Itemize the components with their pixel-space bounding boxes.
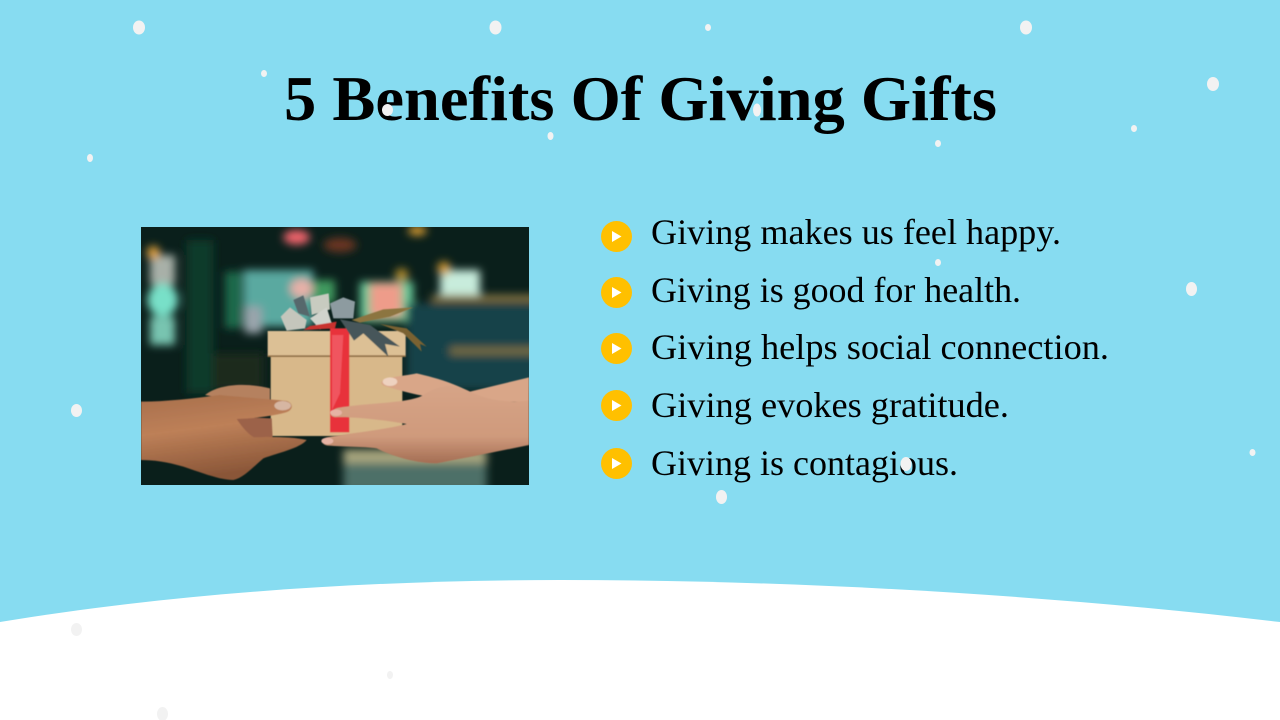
benefit list [601,212,1109,483]
benefit 4 text: Giving evokes gratitude. [651,385,1009,425]
title: 5 Benefits Of Giving Gifts [284,63,997,134]
ribbon bow [281,307,307,331]
right hand [321,373,529,463]
gift box [268,293,427,436]
benefit 3 text: Giving helps social connection. [651,327,1109,367]
photo background bokeh [147,226,540,493]
benefit 5 text: Giving is contagious. [651,443,958,483]
benefit 2 text: Giving is good for health. [651,270,1021,310]
bullet 1 [601,221,632,252]
photo: hands exchanging a gift box [141,226,540,493]
bullet 5 [601,448,632,479]
benefit 1 text: Giving makes us feel happy. [651,212,1061,252]
bullet 2 [601,277,632,308]
bullet 4 [601,390,632,421]
left hand [141,385,307,480]
snow hill [0,580,1280,720]
bullet 3 [601,333,632,364]
